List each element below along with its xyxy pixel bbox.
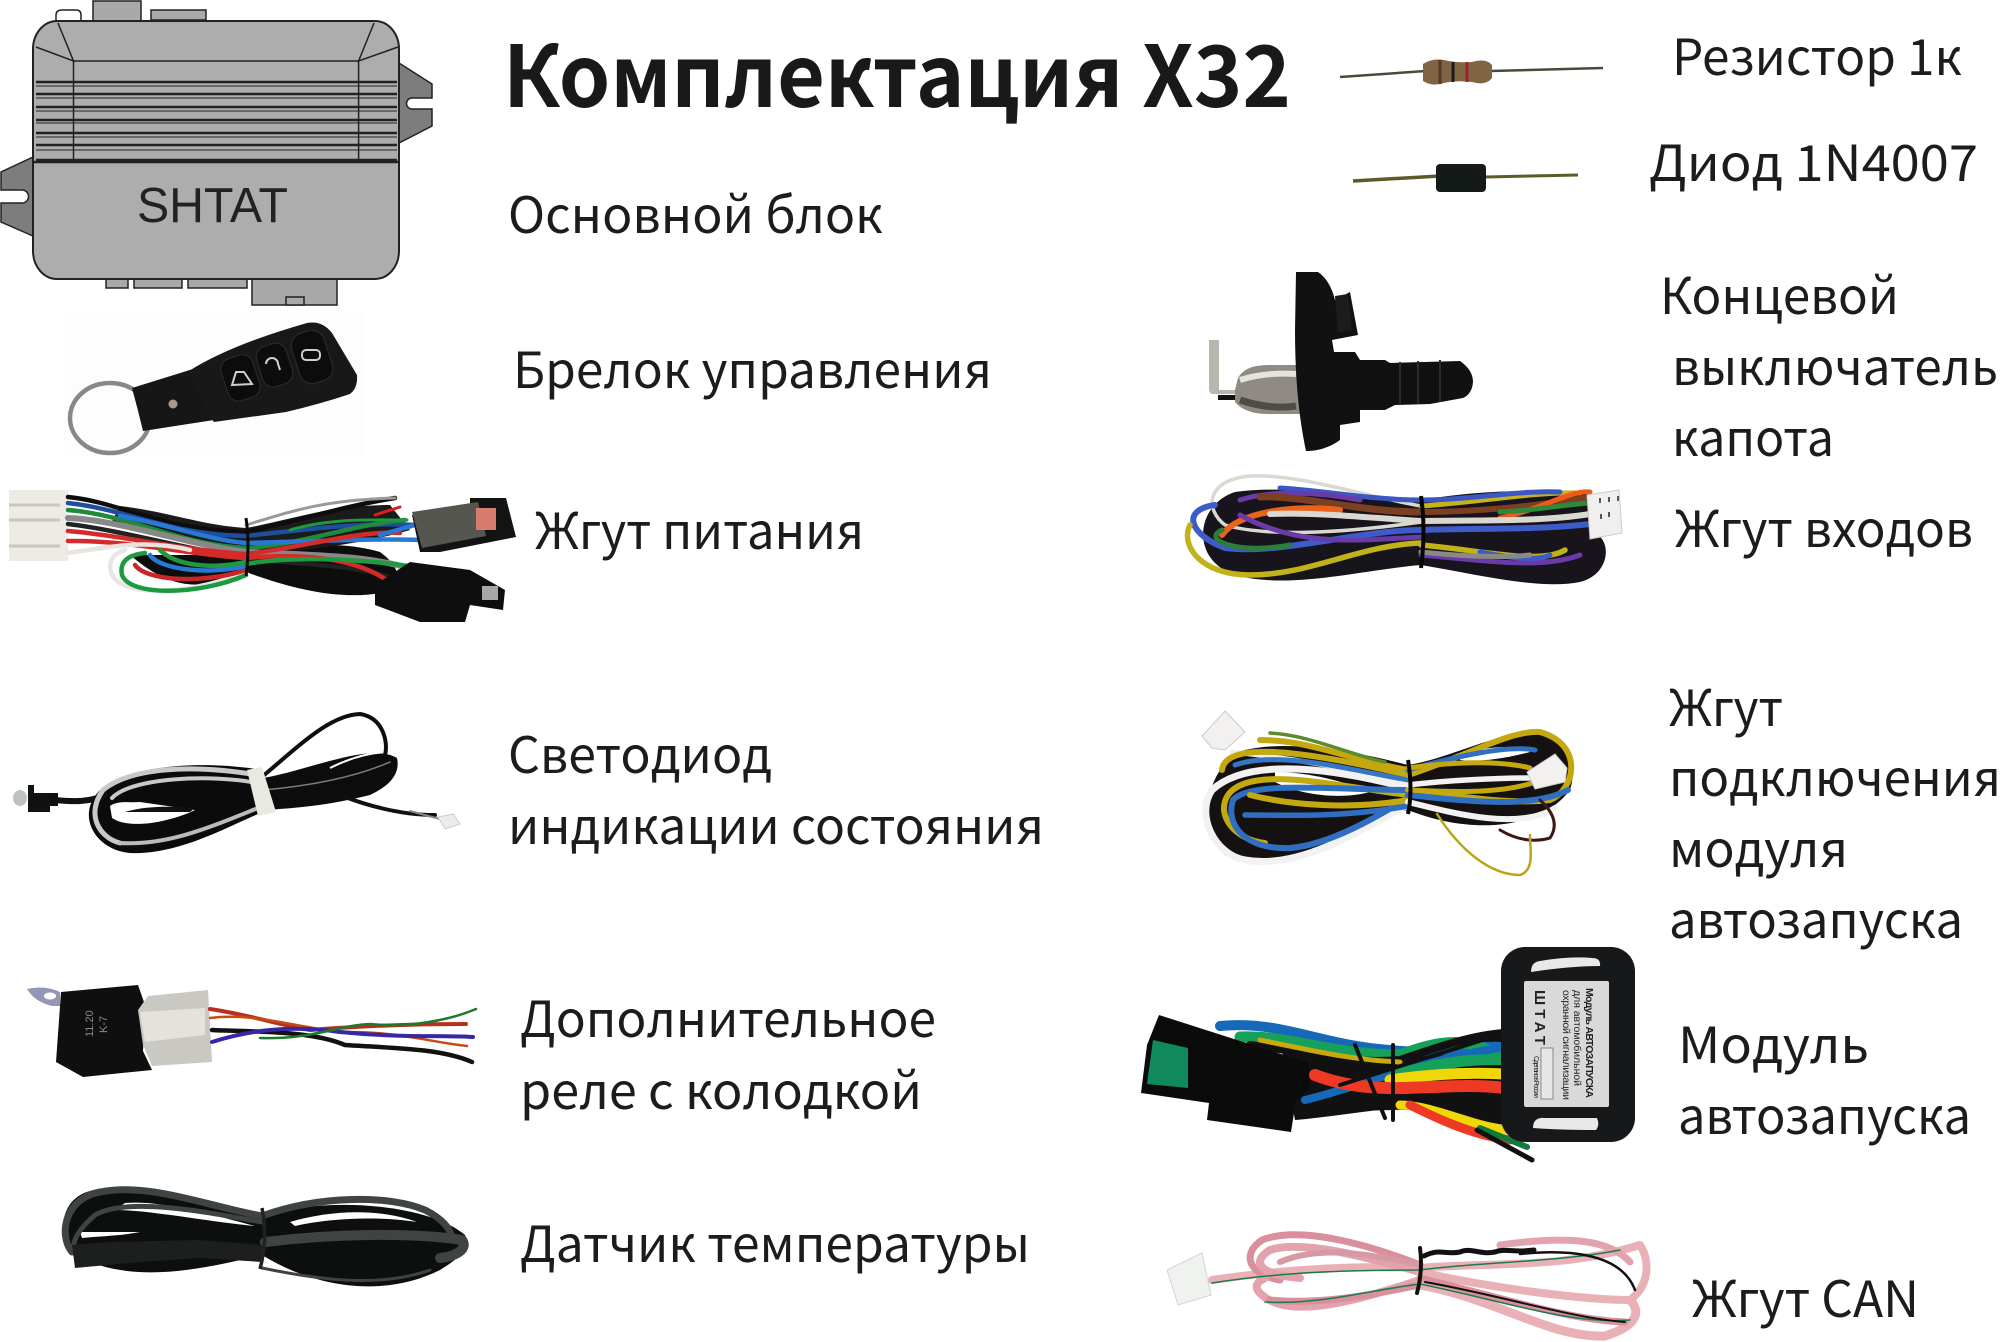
icon: hood limit switch [1209,272,1473,451]
icon: autostart module: для автомобильной [1571,990,1583,1086]
icon: extra relay with socket [27,985,476,1077]
label: switch line group: капота [1672,399,1834,471]
icon: power harness [9,490,516,622]
icon: extra relay with socket: K-7 [98,1016,110,1033]
icon: autostart module: Сделано в России [1532,1056,1539,1098]
icon: autostart module: охранной сигнализации [1560,990,1572,1100]
label: autostart harness: подключения [1669,739,2000,811]
label: inputs harness: Жгут входов [1675,490,1973,562]
title: Комплектация X32 [503,9,1291,132]
label: extra relay: реле с колодкой [520,1052,922,1124]
label: extra relay: Дополнительное [520,980,936,1052]
icon: main control unit: SHTAT [137,179,288,233]
label: switch line group: выключатель [1672,328,1998,400]
icon: temperature sensor [63,1188,467,1286]
icon: LED indicator [13,714,460,853]
label: autostart module: автозапуска [1678,1077,1971,1149]
icon: extra relay with socket: 11.20 [84,1010,96,1037]
label: main unit: Основной блок [508,176,883,248]
icon: diode [1353,164,1578,192]
label: LED indicator: Светодиод [508,716,772,788]
label: switch line group [1660,257,1998,471]
icon: CAN harness [1167,1235,1647,1336]
label: autostart module [1678,1006,1971,1149]
label: switch line group: Концевой [1660,257,1899,329]
label: key fob: Брелок управления [513,331,992,403]
label: autostart harness: Жгут [1669,669,1783,741]
label: power harness: Жгут питания [535,492,864,564]
icon: autostart module: Модуль АВТОЗАПУСКА [1583,988,1595,1098]
label: CAN harness: Жгут CAN [1692,1260,1919,1332]
label: LED indicator [508,716,1044,859]
label: autostart harness [1669,669,2000,953]
icon: inputs harness [1188,476,1622,584]
icon: resistor [1340,60,1603,85]
label: extra relay [520,980,936,1124]
label: LED indicator: индикации состояния [508,787,1044,859]
label: autostart harness: модуля [1669,810,1848,882]
label: autostart harness: автозапуска [1669,881,1963,953]
icon: main control unit [1,1,432,305]
icon: autostart module [1141,947,1635,1160]
icon: autostart module harness [1202,711,1573,875]
label: resistor: Резистор 1к [1672,18,1962,90]
icon: autostart module: ШТАТ [1531,990,1548,1045]
label: diode: Диод 1N4007 [1649,124,1978,196]
label: autostart module: Модуль [1678,1006,1869,1078]
label: temperature sensor: Датчик температуры [520,1205,1030,1277]
icon: remote key fob [64,314,364,457]
